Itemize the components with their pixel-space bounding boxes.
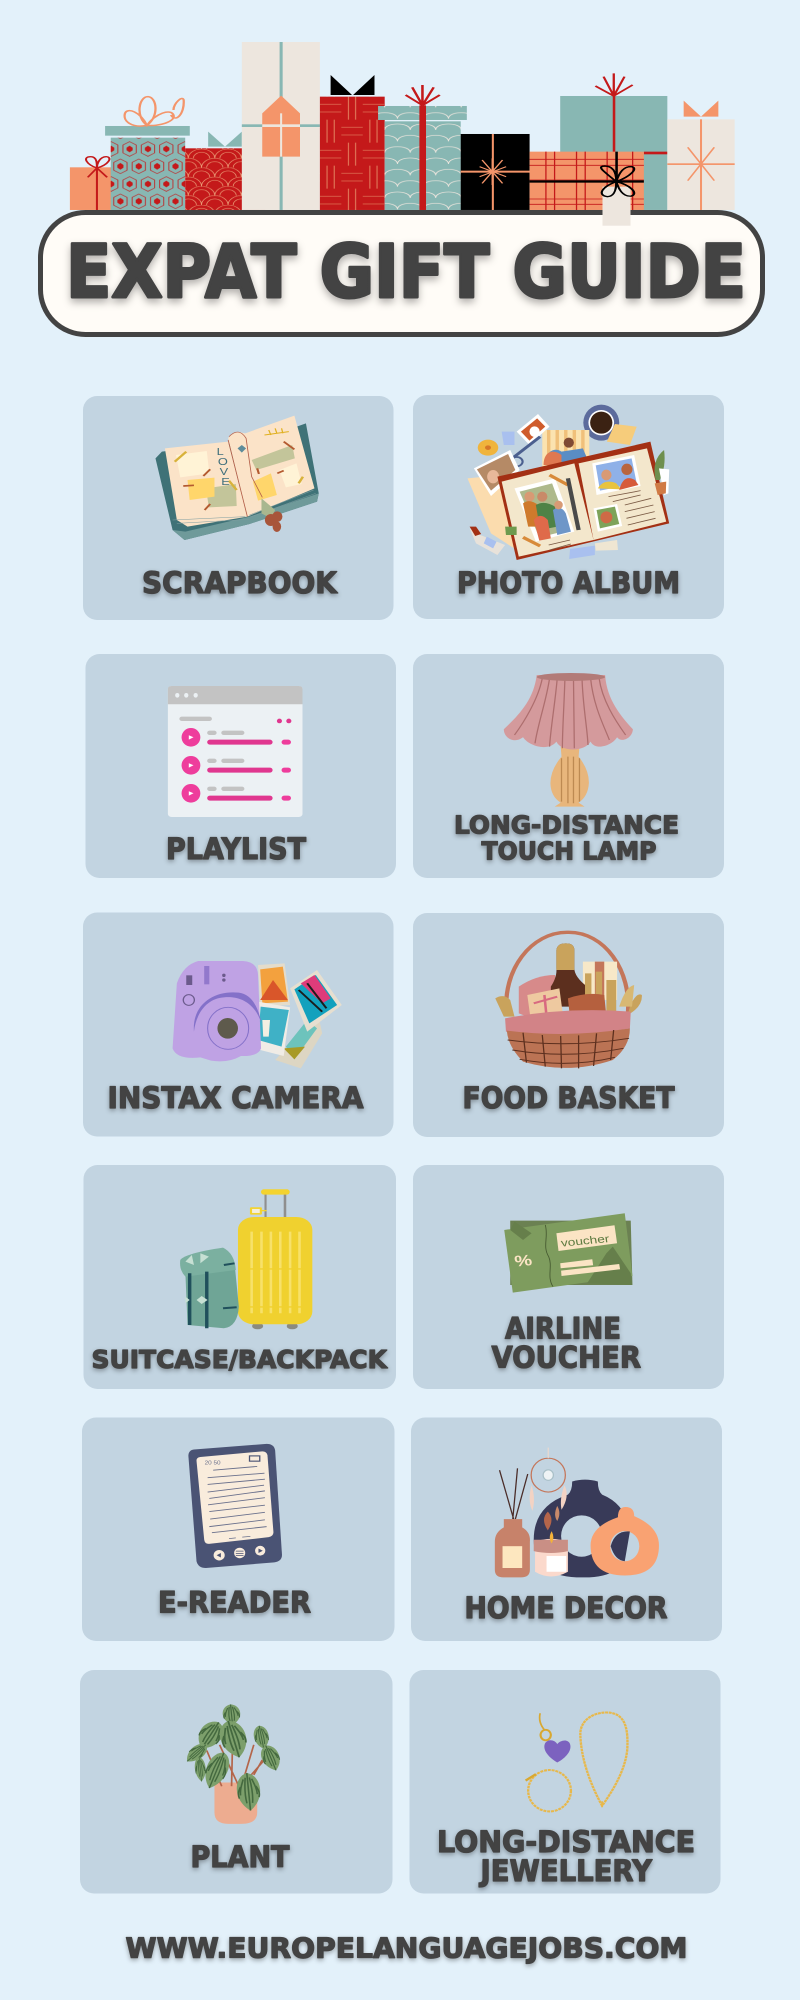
label: airline voucher: AIRLINE bbox=[505, 1312, 621, 1346]
label: airline voucher bbox=[492, 1312, 641, 1374]
icon: voucher tickets: voucher bbox=[560, 1233, 610, 1249]
panel: e-reader bbox=[82, 1418, 394, 1641]
icon: voucher tickets: % bbox=[513, 1251, 534, 1270]
header illustration: stack of gift boxes bbox=[70, 42, 735, 226]
gift: red woven box bbox=[320, 75, 385, 210]
label: photo album: PHOTO ALBUM bbox=[457, 566, 680, 600]
gift tag overlapping title box bbox=[602, 190, 630, 226]
label: home decor: HOME DECOR bbox=[464, 1591, 668, 1625]
label: jewellery title: LONG-DISTANCE bbox=[437, 1825, 695, 1859]
label: e-reader: E-READER bbox=[158, 1586, 311, 1620]
icon: open scrapbook: O bbox=[218, 457, 228, 468]
panel: home decor bbox=[411, 1418, 722, 1641]
icon: open scrapbook: V bbox=[220, 467, 229, 478]
title box bbox=[40, 166, 762, 334]
label: plant: PLANT bbox=[190, 1840, 290, 1874]
icon: open scrapbook bbox=[155, 416, 319, 540]
gift: black box bbox=[461, 134, 530, 210]
panel: food basket bbox=[413, 913, 724, 1137]
icon: food basket bbox=[495, 932, 642, 1068]
icon: home decor bbox=[495, 1448, 659, 1577]
panel: scrapbook bbox=[83, 396, 394, 620]
panel: suitcase and backpack bbox=[84, 1165, 396, 1389]
gift: red scale-pattern box bbox=[185, 132, 265, 210]
panel: long-distance touch lamp bbox=[413, 654, 724, 878]
label: lamp title: LONG-DISTANCE bbox=[454, 810, 679, 840]
icon: e-reader: 20 50 bbox=[205, 1461, 221, 1466]
gift: large teal box bbox=[560, 73, 667, 210]
gift: peach plaid box bbox=[530, 152, 644, 226]
label: lamp title: TOUCH LAMP bbox=[482, 836, 656, 866]
panel: long-distance jewellery bbox=[410, 1670, 720, 1894]
icon: photo album with scattered pictures bbox=[467, 405, 669, 560]
gift: cream box with peach ribbon bbox=[667, 101, 735, 210]
label: playlist: PLAYLIST bbox=[166, 832, 306, 866]
gift: small peach box bbox=[70, 157, 125, 210]
icon: open scrapbook: L bbox=[217, 447, 224, 458]
label: food basket: FOOD BASKET bbox=[462, 1081, 675, 1115]
panel: instax camera bbox=[83, 912, 394, 1136]
label: jewellery title: JEWELLERY bbox=[479, 1854, 653, 1888]
gift bow over tag bbox=[601, 166, 634, 197]
label: jewellery title bbox=[437, 1825, 695, 1888]
label: lamp title bbox=[454, 810, 679, 866]
icon: lamp bbox=[504, 673, 633, 807]
panel: plant bbox=[80, 1670, 392, 1894]
icon: playlist app window bbox=[168, 686, 303, 817]
icon: e-reader bbox=[188, 1444, 282, 1568]
icon: voucher tickets bbox=[504, 1213, 632, 1293]
gift: teal hex-pattern box bbox=[105, 97, 190, 210]
label: airline voucher: VOUCHER bbox=[492, 1340, 641, 1374]
icon: jewellery bbox=[526, 1712, 627, 1811]
label: instax camera: INSTAX CAMERA bbox=[108, 1081, 364, 1115]
label: suitcase/backpack: SUITCASE/BACKPACK bbox=[92, 1345, 389, 1374]
gift: tall cream box bbox=[242, 42, 320, 210]
gift: teal scallop box bbox=[378, 85, 467, 210]
icon: open scrapbook: E bbox=[221, 477, 230, 488]
icon: potted plant bbox=[182, 1704, 284, 1824]
title: EXPAT GIFT GUIDE bbox=[66, 230, 746, 315]
panel: photo album bbox=[413, 395, 724, 619]
panel: playlist bbox=[86, 654, 396, 878]
footer website: WWW.EUROPELANGUAGEJOBS.COM bbox=[126, 1932, 688, 1964]
label: scrapbook: SCRAPBOOK bbox=[142, 566, 338, 600]
icon: instant camera with photos bbox=[173, 961, 342, 1068]
icon: suitcase and backpack bbox=[180, 1189, 312, 1329]
panel: airline voucher bbox=[413, 1165, 724, 1389]
